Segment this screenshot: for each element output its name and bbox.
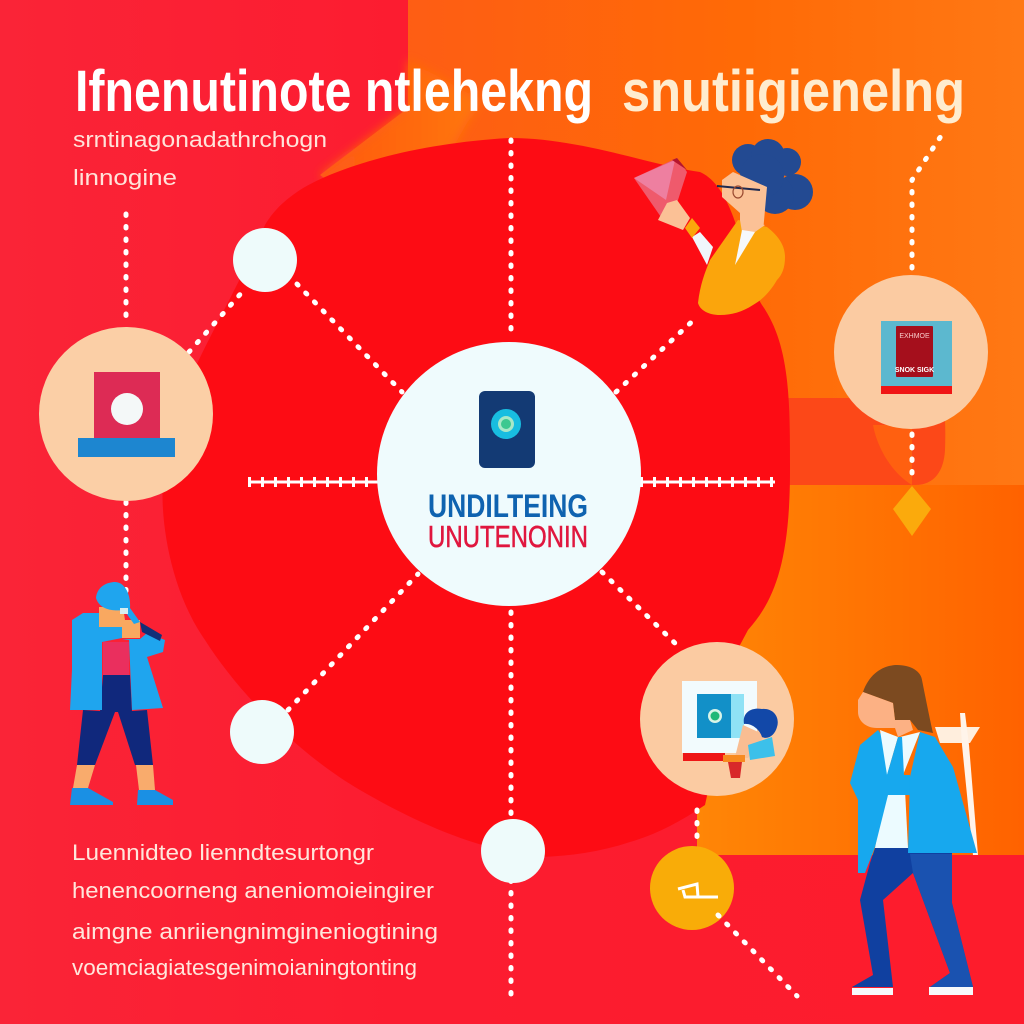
subtitle bbox=[73, 127, 327, 190]
central hub bbox=[377, 342, 641, 606]
bottom text block bbox=[72, 840, 438, 980]
icon circle: right: EXHMOE bbox=[899, 333, 930, 340]
small yellow circle bbox=[650, 846, 734, 930]
icon circle: left bbox=[39, 327, 213, 501]
title bbox=[75, 59, 965, 124]
central hub: UNDILTEING bbox=[428, 488, 588, 524]
diamond marker bbox=[893, 486, 931, 536]
bottom text block: henencoorneng aneniomoieingirer bbox=[72, 878, 434, 903]
central red blob bbox=[162, 138, 790, 857]
bottom text block: aimgne anriiengnimgineniogtining bbox=[72, 919, 438, 944]
bottom text block: Luennidteo lienndtesurtongr bbox=[72, 840, 374, 865]
subtitle: srntinagonadathrchogn bbox=[73, 127, 327, 152]
icon circle: bottom right bbox=[640, 642, 794, 796]
node: bottom left bbox=[230, 700, 294, 764]
horizontal axes bbox=[248, 480, 775, 484]
node: top left bbox=[233, 228, 297, 292]
title: Ifnenutinote ntlehekng bbox=[75, 59, 593, 124]
title: snutiigienelng bbox=[622, 59, 965, 124]
subtitle: linnogine bbox=[73, 165, 177, 190]
dotted connectors bbox=[126, 130, 945, 995]
person: blue jacket left bbox=[70, 582, 173, 805]
dotted connector: lower right bbox=[718, 915, 797, 996]
person: woman with glasses bbox=[634, 139, 813, 315]
central hub: UNUTENONIN bbox=[428, 519, 588, 554]
bottom text block: voemciagiatesgenimoianingtonting bbox=[72, 955, 417, 980]
person: woman with long hair right bbox=[850, 665, 980, 995]
icon circle: right: SNOK SIGK bbox=[895, 367, 934, 374]
node: bottom centre bbox=[481, 819, 545, 883]
icon circle: right bbox=[834, 275, 988, 429]
